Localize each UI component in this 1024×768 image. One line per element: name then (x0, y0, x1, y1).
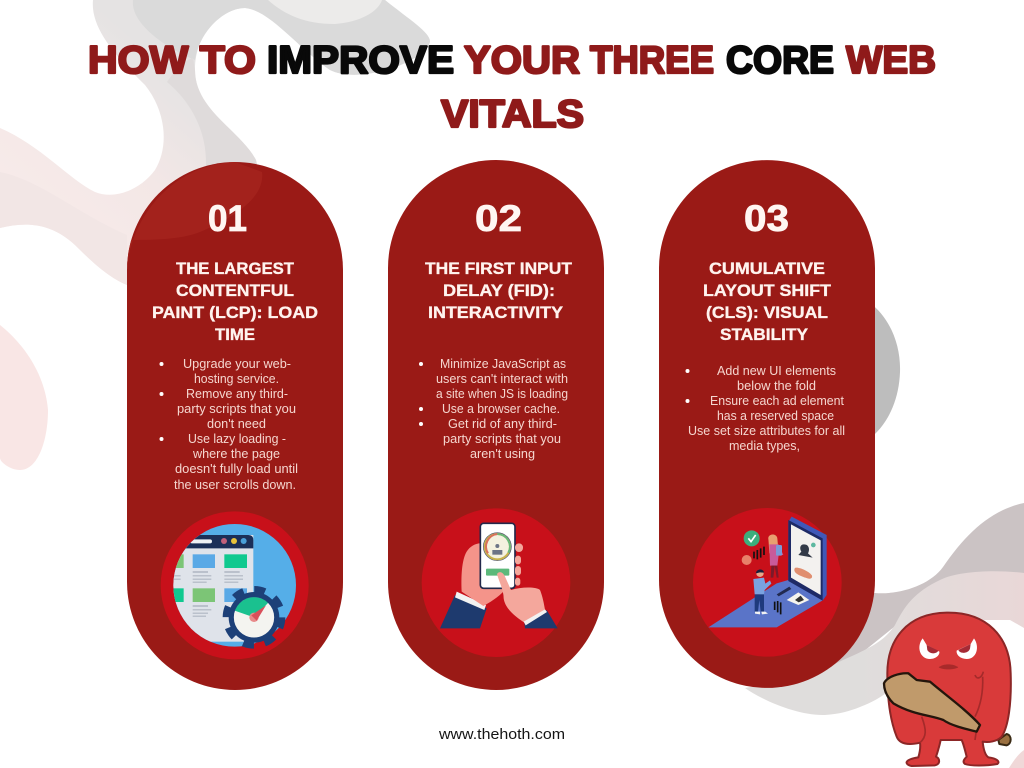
card 3 bullet list: Use set size attributes for all (688, 424, 845, 438)
card 1 translucent wave overlay (127, 162, 262, 270)
footer website: www.thehoth.com (438, 727, 565, 743)
background: top-left grey and pink waves (0, 0, 430, 285)
card 1 bullet list: Use lazy loading - (188, 432, 286, 446)
card 3 heading: STABILITY (720, 325, 809, 344)
title: THREE (590, 39, 714, 82)
card 2 bullet list: party scripts that you (443, 432, 561, 446)
card 3 heading: (CLS): VISUAL (706, 303, 828, 322)
background: left pink blob (0, 325, 48, 470)
card 2 bullet list (419, 357, 568, 461)
card 1 heading (152, 259, 318, 344)
card 3 heading (703, 259, 832, 344)
card 1 bullet list: Remove any third- (186, 387, 288, 401)
title: CORE (726, 39, 834, 82)
mascot arm lines (920, 672, 983, 743)
card 3 background (659, 160, 875, 688)
card 1 bullet list: Upgrade your web- (183, 357, 291, 371)
card 3 bullet list: Ensure each ad element (710, 394, 845, 408)
card 2 heading: THE FIRST INPUT (425, 259, 573, 278)
card 1 bullet list: party scripts that you (177, 402, 296, 416)
panel: card 1 LCP (127, 162, 343, 690)
card 2 number: 02 (475, 198, 522, 239)
card 2 bullet list: aren't using (470, 447, 535, 461)
card 1 bullet list: hosting service. (194, 372, 279, 386)
card 2 heading: DELAY (FID): (443, 281, 555, 300)
card 1 heading: TIME (215, 325, 255, 344)
card 1 heading: PAINT (LCP): LOAD (152, 303, 318, 322)
card 2 bullet list: Use a browser cache. (442, 402, 560, 416)
card 3 bullet list: below the fold (737, 379, 816, 393)
title: HOW TO (88, 39, 256, 82)
icon: browser window with speed gauge (160, 511, 309, 659)
card 2 bullet list: Minimize JavaScript as (440, 357, 566, 371)
icon: hands holding phone with speed score (422, 508, 570, 657)
mascot mouth (939, 664, 958, 669)
card 3 bullet list: has a reserved space (717, 409, 834, 423)
card 3 heading: CUMULATIVE (709, 259, 825, 278)
card 1 heading: THE LARGEST (176, 259, 295, 278)
card 2 background (388, 160, 604, 690)
title: VITALS (441, 93, 584, 136)
card 1 bullet list: doesn't fully load until (175, 462, 298, 476)
title: YOUR (464, 39, 580, 82)
mascot club (884, 673, 980, 732)
mascot eyes (919, 638, 977, 659)
card 3 bullet list: media types, (729, 439, 800, 453)
panel: card 3 CLS (659, 160, 875, 688)
title (88, 39, 936, 136)
panel: card 2 FID (388, 160, 604, 690)
mascot club handle (998, 734, 1011, 745)
icon: isometric phone with people (693, 508, 842, 657)
card 3 bullet list (686, 364, 845, 453)
card 2 heading: INTERACTIVITY (428, 303, 564, 322)
icon: red monster mascot with club (884, 613, 1011, 766)
mascot body (887, 613, 1011, 766)
card 3 number: 03 (744, 198, 789, 239)
card 2 bullet list: users can't interact with (436, 372, 568, 386)
card 3 bullet list: Add new UI elements (717, 364, 836, 378)
card 3 heading: LAYOUT SHIFT (703, 281, 832, 300)
background: bottom-right waves (745, 503, 1024, 768)
card 2 bullet list: a site when JS is loading (436, 387, 568, 401)
title: IMPROVE (267, 39, 454, 82)
card 1 number: 01 (208, 198, 247, 239)
card 1 bullet list: where the page (192, 447, 280, 461)
card 1 bullet list: the user scrolls down. (174, 478, 296, 492)
card 2 bullet list: Get rid of any third- (448, 417, 557, 431)
card 1 bullet list (160, 357, 298, 492)
card 1 background (127, 162, 343, 690)
card 2 heading (425, 259, 573, 322)
card 1 bullet list: don't need (207, 417, 266, 431)
background: right grey blob (868, 303, 900, 440)
card 1 heading: CONTENTFUL (176, 281, 294, 300)
title: WEB (846, 39, 936, 82)
